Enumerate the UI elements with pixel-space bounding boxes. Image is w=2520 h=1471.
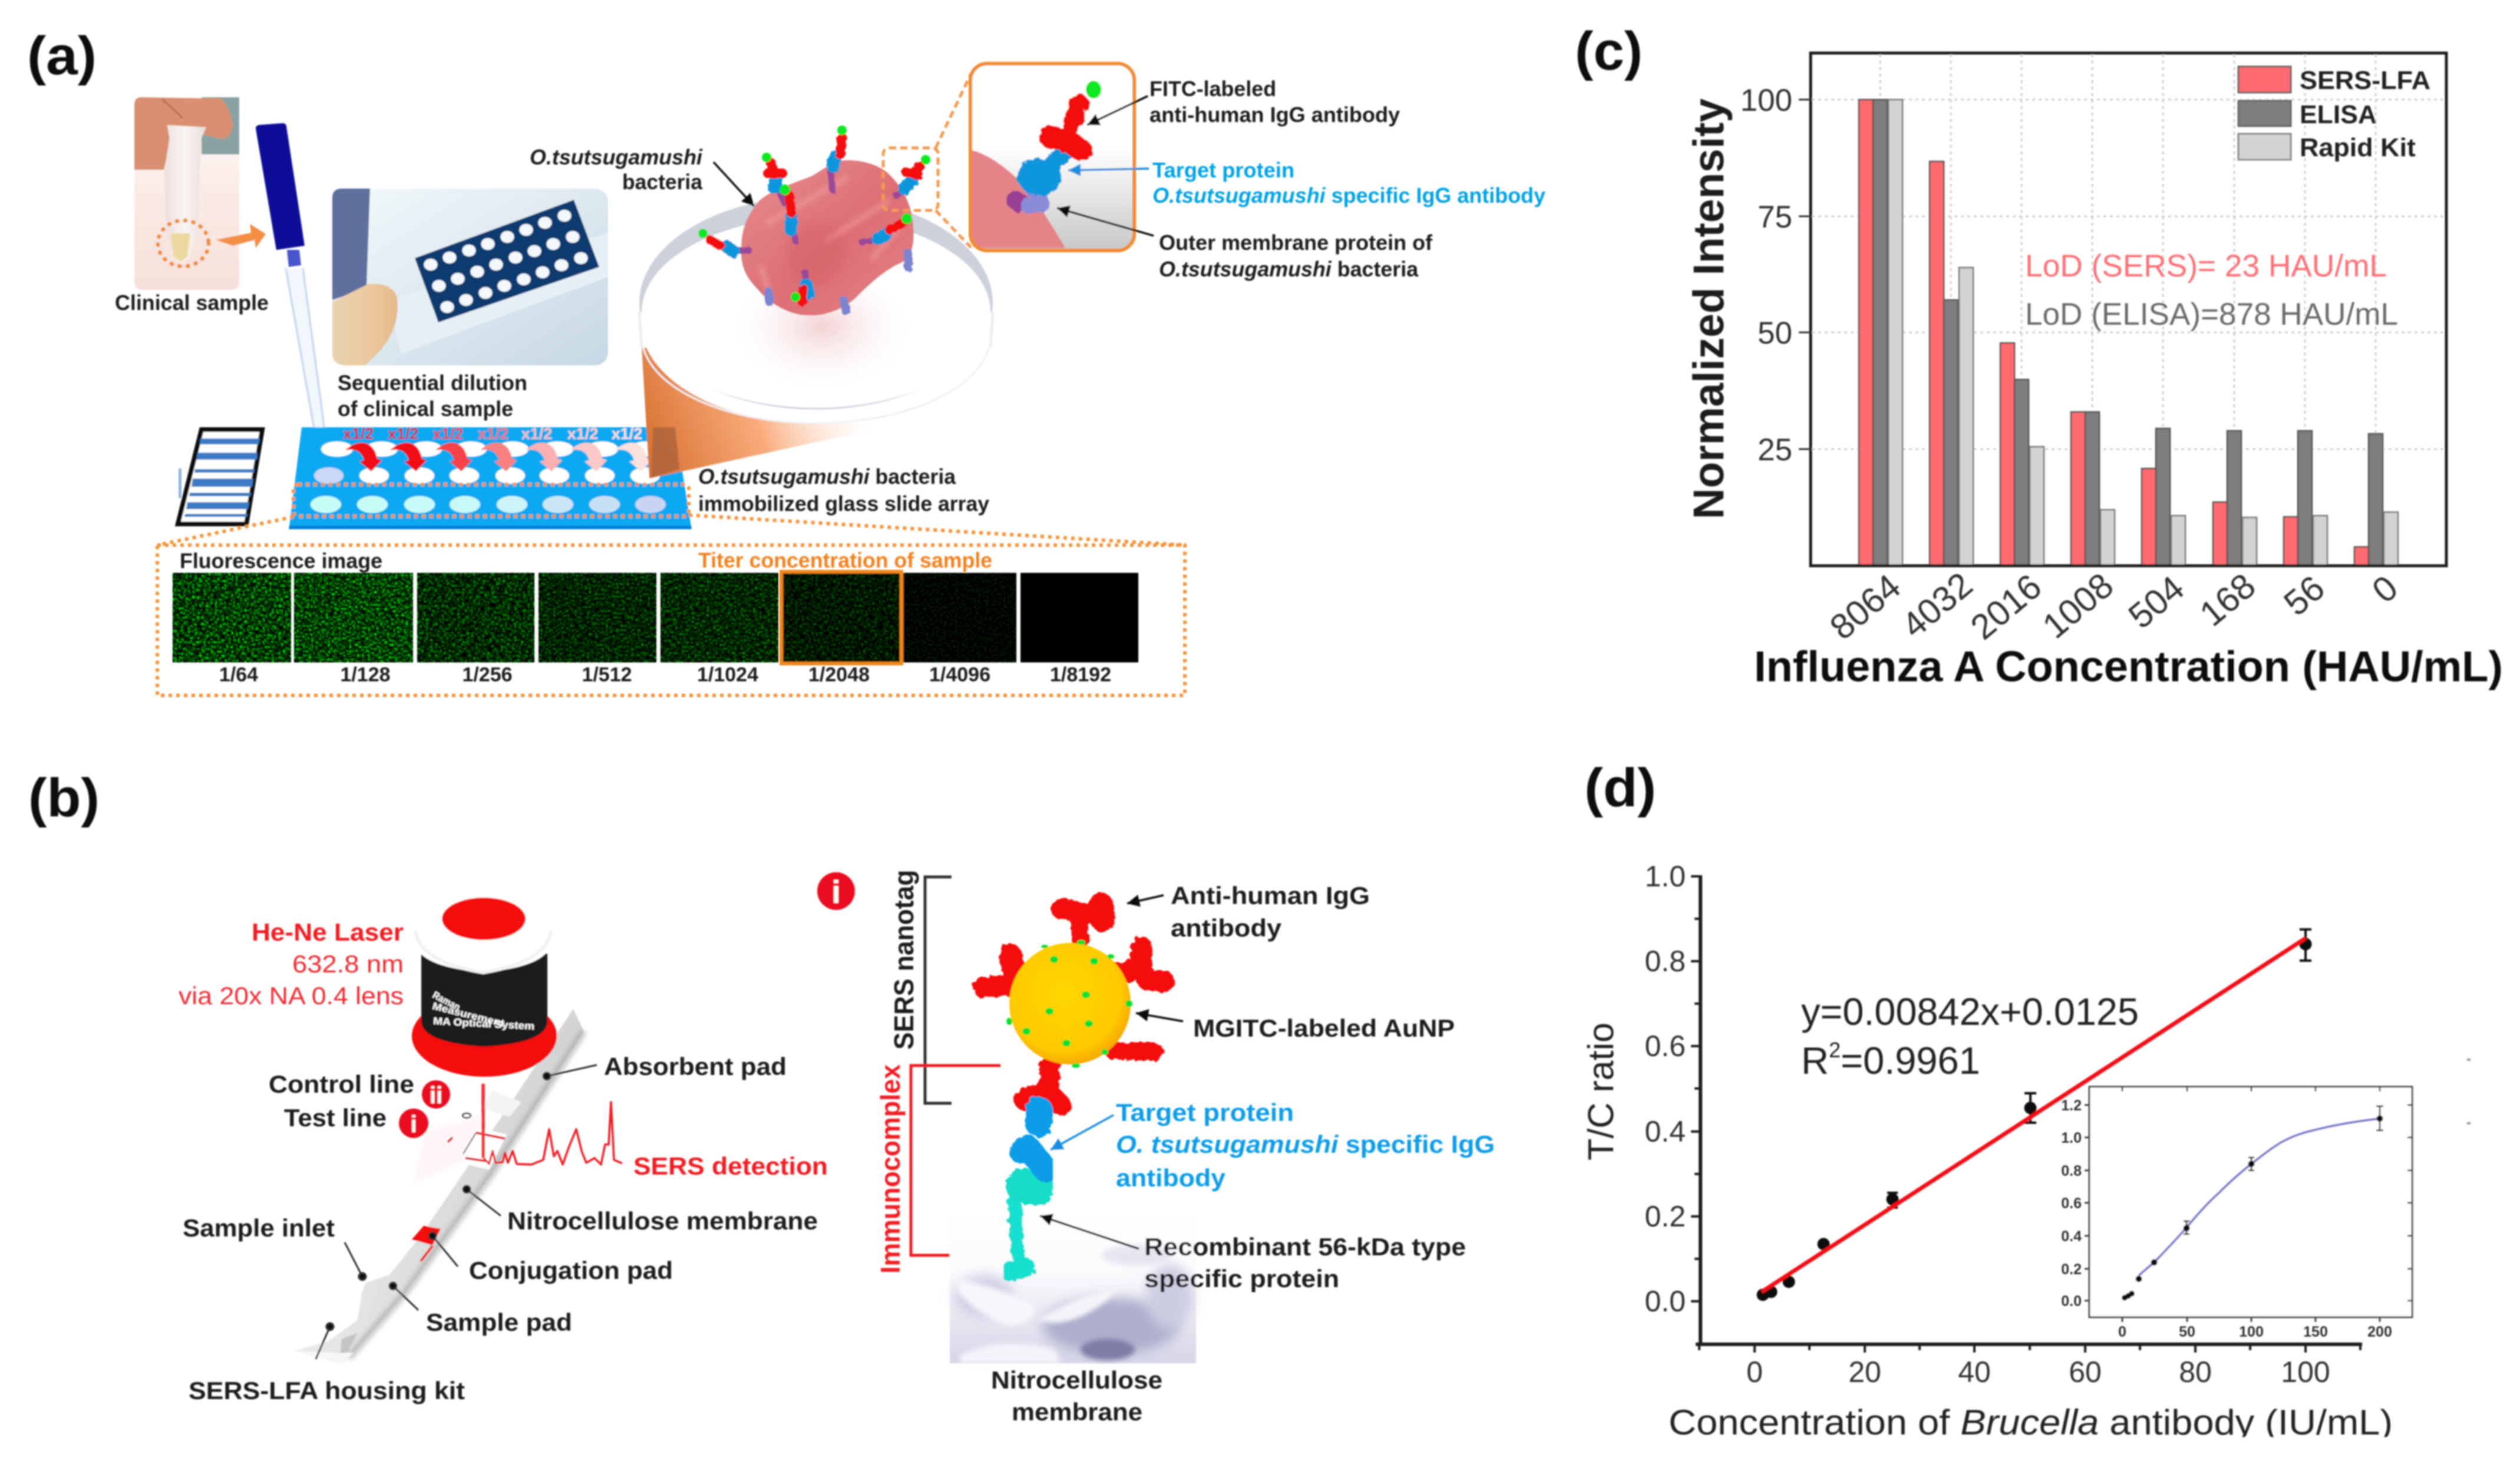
caption: control line: Control line <box>269 1070 414 1098</box>
inset y labels: 1.0 <box>2061 1130 2082 1146</box>
caption: target protein: O.tsutsugamushi specific IgG antibody <box>1152 183 1545 207</box>
heading: fluorescence image: Fluorescence image <box>180 549 382 573</box>
red antibodies <box>984 905 1164 1105</box>
dilution labels: 1/8192 <box>1050 664 1111 686</box>
y ticks <box>1799 100 1811 449</box>
y tick labels: 50 <box>1758 316 1792 351</box>
data points <box>1757 929 2311 1301</box>
caption: target protein: O. tsutsugamushi specific IgG <box>1116 1130 1495 1158</box>
bars: SERS-LFA <box>1859 100 2369 566</box>
x tick labels: 8064 <box>1822 566 1908 647</box>
leader: sample inlet <box>345 1242 366 1280</box>
inset data <box>2122 1106 2383 1300</box>
y tick labels: 0.6 <box>1644 1030 1686 1063</box>
dilution labels: 1/1024 <box>697 664 758 686</box>
y tick labels: 25 <box>1758 433 1792 467</box>
caption: slide array <box>698 464 989 516</box>
caption: bacteria: bacteria <box>622 170 703 194</box>
panel label c: (c) <box>1575 21 1643 81</box>
x tick labels: 4032 <box>1894 565 1980 645</box>
heading: titer concentration: Titer concentration of sample <box>698 548 992 572</box>
bars: Rapid Kit <box>1888 100 2398 566</box>
caption: absorbent pad: Absorbent pad <box>604 1053 787 1080</box>
dilution factor labels: x1/2 <box>521 425 552 443</box>
fluorescence image panel <box>157 515 1185 695</box>
inset chart <box>2061 1087 2412 1340</box>
fluorescence micrographs <box>173 573 1138 662</box>
y tick labels: 0.0 <box>1644 1285 1686 1318</box>
laser objective cylinder <box>412 892 557 1077</box>
fluorescent labels <box>698 126 930 302</box>
leader: conjugation pad <box>429 1232 458 1266</box>
dilution labels: 1/2048 <box>808 664 870 686</box>
y tick labels: 0.2 <box>1644 1200 1686 1233</box>
dilution labels: 1/512 <box>582 664 632 686</box>
leader: nitrocellulose <box>463 1186 501 1216</box>
MGITC dots <box>1006 940 1132 1068</box>
arrow: FITC pointer <box>1087 96 1148 125</box>
label: immunocomplex: Immunocomplex <box>875 1064 906 1274</box>
caption: anti-human IgG: Anti-human IgG <box>1171 882 1370 909</box>
caption: target protein: Target protein <box>1116 1099 1294 1126</box>
label: SERS nanotag: SERS nanotag <box>889 870 919 1050</box>
surface antibodies <box>710 137 920 311</box>
panel d: Brucella calibration chart <box>1581 758 2471 1455</box>
objective label: MA Optical System <box>433 1015 535 1032</box>
x tick labels: 1008 <box>2035 565 2121 646</box>
arrow: sample to pipette <box>216 224 266 248</box>
caption: target protein <box>1152 158 1545 207</box>
dilution factor labels: x1/2 <box>432 425 463 443</box>
dashed zoom square <box>883 74 971 248</box>
legend: ELISA <box>2300 100 2377 129</box>
R squared: =0.9961 <box>1841 1039 1980 1082</box>
y tick labels: 75 <box>1758 200 1792 235</box>
photo: slide held by finger <box>332 189 608 365</box>
legend: SERS-LFA <box>2300 66 2430 95</box>
dilution factor labels: x1/2 <box>388 425 418 443</box>
caption: recombinant protein: Recombinant 56-kDa type <box>1144 1233 1466 1261</box>
caption: recombinant protein <box>1144 1233 1466 1292</box>
x tick labels: 40 <box>1958 1355 1991 1388</box>
stray marks <box>2467 1060 2471 1123</box>
x tick labels: 2016 <box>1963 566 2049 647</box>
badge i large <box>817 872 855 910</box>
R squared: R <box>1801 1039 1829 1082</box>
x tick labels: 0 <box>1746 1355 1763 1388</box>
caption: FITC antibody: FITC-labeled <box>1150 77 1276 101</box>
inset y labels: 1.2 <box>2061 1097 2082 1114</box>
dilution labels: 1/128 <box>340 664 391 686</box>
conjugation pad <box>412 1226 441 1245</box>
caption: target protein: Target protein <box>1152 158 1294 182</box>
caption: FITC antibody <box>1150 77 1400 127</box>
inset x labels <box>2118 1324 2392 1340</box>
inset y labels: 0.4 <box>2061 1228 2082 1245</box>
badge ii <box>422 1080 450 1109</box>
x tick labels <box>1822 565 2405 647</box>
photo: clinical sample tube <box>134 97 239 290</box>
dilution labels: 1/64 <box>219 664 258 686</box>
caption: MGITC AuNP: MGITC-labeled AuNP <box>1193 1014 1455 1042</box>
inset ticks <box>2085 1087 2412 1322</box>
laser beam <box>481 1084 485 1158</box>
SERS spectrum <box>484 1102 622 1165</box>
caption: housing kit: SERS-LFA housing kit <box>189 1377 465 1404</box>
x tick labels: 20 <box>1848 1355 1881 1388</box>
laser caption: via 20x NA 0.4 lens <box>179 982 404 1010</box>
panel label b: (b) <box>28 768 100 828</box>
y tick labels: 100 <box>1740 83 1792 118</box>
panel label d: (d) <box>1584 758 1656 818</box>
objective label: Measurement <box>431 1000 506 1029</box>
fit line <box>1762 938 2306 1292</box>
icon: pipette <box>256 123 329 466</box>
dilution labels: 1/256 <box>462 664 513 686</box>
legend <box>2238 66 2430 162</box>
target antibody and recombinant protein chain <box>1010 1111 1046 1272</box>
axes frame <box>1811 53 2446 566</box>
leader: housing kit <box>316 1323 333 1359</box>
bars: ELISA <box>1873 100 2383 566</box>
inset x labels: 50 <box>2179 1324 2195 1340</box>
y axis title: Normalized Intensity <box>1685 98 1733 519</box>
caption: sample inlet: Sample inlet <box>183 1214 335 1242</box>
glass slide array plate <box>289 427 692 529</box>
y axis title: T/C ratio <box>1581 1023 1621 1160</box>
LFA strip housing <box>295 1009 584 1364</box>
caption: bacteria <box>530 145 703 194</box>
caption: conjugation pad: Conjugation pad <box>469 1256 673 1284</box>
R squared: 2 <box>1829 1038 1841 1062</box>
leader: absorbent pad <box>543 1065 597 1080</box>
caption: outer membrane protein <box>1159 230 1433 281</box>
caption: nitrocellulose membrane: Nitrocellulose membrane <box>507 1207 818 1235</box>
caption: nitrocellulose membrane: membrane <box>1012 1398 1142 1426</box>
bacterium body <box>741 160 914 315</box>
inset x labels: 100 <box>2239 1324 2264 1340</box>
icon: barcode slide <box>178 430 262 524</box>
inset x labels: 150 <box>2303 1324 2328 1340</box>
objective label: Raman <box>431 990 462 1013</box>
caption: nitrocellulose membrane <box>991 1366 1162 1426</box>
caption: slide array: immobilized glass slide array <box>698 492 989 516</box>
arrow: anti-human IgG <box>1127 895 1164 903</box>
laser caption <box>179 918 404 1010</box>
nitrocellulose membrane texture <box>950 1205 1196 1363</box>
shaded slide corner <box>652 427 679 477</box>
caption: target protein: antibody <box>1116 1164 1226 1192</box>
panel label a: (a) <box>27 26 97 86</box>
selected titer highlight <box>781 572 901 664</box>
y tick labels <box>1644 860 1686 1318</box>
bracket: immunocomplex <box>911 1066 1000 1255</box>
inset y labels: 0.0 <box>2061 1293 2082 1310</box>
caption: clinical sample: Clinical sample <box>115 291 269 315</box>
inset x labels: 0 <box>2118 1324 2126 1340</box>
arrow: target protein <box>1051 1115 1114 1150</box>
leader: sample pad <box>389 1282 418 1310</box>
caption: outer membrane protein: Outer membrane protein of <box>1159 230 1433 255</box>
annotation: LoD SERS: LoD (SERS)= 23 HAU/mL <box>2025 249 2387 283</box>
laser caption: He-Ne Laser <box>252 918 404 946</box>
inset y labels: 0.6 <box>2061 1195 2082 1212</box>
y tick labels: 0.8 <box>1644 945 1686 978</box>
x tick labels <box>1746 1355 2330 1388</box>
glass dish with bacterium <box>638 126 994 424</box>
dilution labels <box>219 664 1111 686</box>
legend: Rapid Kit <box>2300 133 2416 162</box>
arrow: outer membrane pointer <box>1057 208 1154 236</box>
x tick labels: 60 <box>2069 1355 2102 1388</box>
caption: slide array: O.tsutsugamushi bacteria <box>698 464 956 489</box>
caption: sample pad: Sample pad <box>426 1308 572 1336</box>
y tick labels: 1.0 <box>1644 860 1686 893</box>
slide with wells <box>415 200 599 322</box>
dilution arrows <box>345 443 652 471</box>
x tick labels: 80 <box>2179 1355 2212 1388</box>
x tick labels: 0 <box>2364 568 2405 611</box>
inset: antibody close-up <box>970 64 1134 250</box>
inset y labels <box>2061 1097 2082 1310</box>
dilution factor labels: x1/2 <box>478 425 508 443</box>
caption: sequential dilution <box>338 371 527 421</box>
panel c: influenza bar chart <box>1575 21 2503 691</box>
arrow: recombinant protein <box>1040 1216 1139 1249</box>
x axis title: Concentration of Brucella antibody (IU/mL) <box>1669 1403 2393 1442</box>
inset curve <box>2139 1119 2380 1275</box>
caption: anti-human IgG: antibody <box>1171 914 1282 942</box>
caption: nitrocellulose membrane: Nitrocellulose <box>991 1366 1162 1394</box>
orange projection cone <box>641 336 884 479</box>
badge i <box>399 1109 428 1138</box>
dilution factor labels: x1/2 <box>567 425 598 443</box>
caption: target protein <box>1116 1099 1495 1192</box>
caption: test line: Test line <box>284 1104 387 1132</box>
annotation: LoD ELISA: LoD (ELISA)=878 HAU/mL <box>2025 297 2398 332</box>
laser caption: 632.8 nm <box>292 950 404 978</box>
caption: outer membrane protein: O.tsutsugamushi bacteria <box>1159 257 1419 281</box>
grid lines <box>1812 54 2445 565</box>
dilution factor labels: x1/2 <box>612 425 642 443</box>
caption: FITC antibody: anti-human IgG antibody <box>1150 103 1400 127</box>
caption: bacteria: O.tsutsugamushi <box>530 145 703 169</box>
axes <box>1691 875 2362 1353</box>
dilution factor labels <box>343 425 642 443</box>
equation: y=0.00842x+0.0125 <box>1801 990 2139 1033</box>
caption: anti-human IgG <box>1171 882 1370 942</box>
panel b: SERS-LFA schematic <box>28 768 1495 1426</box>
badge i: i <box>410 1112 417 1137</box>
caption: SERS detection: SERS detection <box>633 1152 828 1180</box>
objective label <box>431 990 535 1032</box>
y tick labels: 0.4 <box>1644 1115 1686 1148</box>
bracket: SERS nanotag <box>925 877 952 1103</box>
x tick labels: 168 <box>2192 566 2263 634</box>
arrow: target protein pointer <box>1068 169 1149 170</box>
panel a: serological titer workflow <box>27 26 1545 695</box>
arrow: bacteria pointer <box>714 162 754 206</box>
test window lines <box>465 1133 505 1161</box>
inset x labels: 200 <box>2367 1324 2392 1340</box>
x axis title: Influenza A Concentration (HAU/mL) <box>1754 643 2503 691</box>
x tick labels: 504 <box>2121 568 2192 636</box>
caption: sequential dilution: of clinical sample <box>338 397 513 421</box>
x tick labels: 56 <box>2277 568 2332 624</box>
gold sphere <box>1009 943 1131 1064</box>
x tick labels: 100 <box>2281 1355 2330 1388</box>
gold nanoparticle with antibodies <box>984 905 1164 1105</box>
inset y labels: 0.2 <box>2061 1261 2082 1278</box>
inset y labels: 0.8 <box>2061 1163 2082 1179</box>
badge i large: i <box>831 875 841 910</box>
badge ii: ii <box>430 1083 442 1109</box>
caption: sequential dilution: Sequential dilution <box>338 371 527 395</box>
dilution labels: 1/4096 <box>929 664 990 686</box>
caption: recombinant protein: specific protein <box>1144 1265 1339 1292</box>
dilution factor labels: x1/2 <box>343 425 374 443</box>
arrow: MGITC AuNP <box>1136 1013 1183 1021</box>
y tick labels <box>1740 83 1792 467</box>
